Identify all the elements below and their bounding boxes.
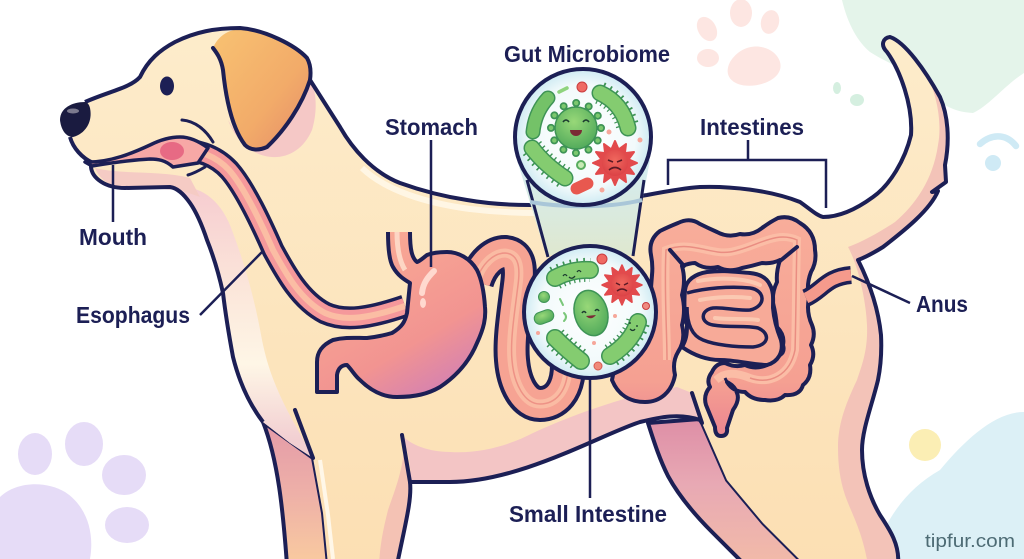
background blob: pale blue bottom right	[872, 412, 1024, 559]
highlight: back	[362, 168, 640, 213]
ear fill	[213, 29, 311, 149]
mouth and tongue	[85, 137, 208, 167]
shading: tail	[848, 72, 948, 260]
coil highlights	[698, 279, 760, 320]
green ring dot	[577, 161, 585, 169]
pink dots	[536, 314, 617, 345]
red dot	[597, 254, 607, 264]
eye	[160, 76, 174, 96]
stomach highlights	[397, 232, 405, 270]
nose highlight	[67, 108, 79, 114]
stomach	[317, 232, 485, 397]
colon centre line	[665, 237, 797, 380]
ear edge	[213, 48, 310, 149]
label: Intestines: Intestines	[700, 114, 804, 140]
green pill	[533, 308, 555, 326]
icon: lavender paw	[0, 422, 149, 559]
esophagus	[170, 150, 405, 318]
label: Anus: Anus	[916, 291, 968, 317]
red dot bottom	[594, 362, 602, 370]
spiky bacterium right	[600, 93, 628, 128]
callout lines	[113, 140, 910, 498]
decorative swoosh: blue	[980, 136, 1016, 171]
shading: chest and neck	[170, 186, 313, 458]
happy virus	[551, 103, 601, 153]
rectum join	[725, 378, 727, 382]
green marks	[560, 299, 566, 321]
small intestine	[476, 253, 568, 404]
spiky bacterium lower left	[555, 338, 581, 361]
shading: belly band	[402, 387, 700, 482]
cheek line	[182, 120, 213, 175]
shading: under ear	[228, 82, 316, 157]
angry red virus	[593, 141, 637, 185]
smiling bacterium top	[555, 270, 590, 278]
colon inner shading	[665, 237, 797, 380]
coil divider	[687, 287, 766, 347]
large intestine	[612, 217, 816, 436]
funnel between circles	[517, 160, 650, 255]
label: Small Intestine: Small Intestine	[509, 501, 667, 527]
background dot: yellow	[909, 429, 941, 461]
label: Esophagus: Esophagus	[76, 302, 190, 328]
label: Mouth: Mouth	[79, 224, 147, 250]
label: Stomach: Stomach	[385, 114, 478, 140]
shading: lower jaw	[95, 168, 200, 197]
band across funnel	[530, 200, 642, 206]
throat highlight	[160, 142, 184, 160]
highlight: front leg	[320, 460, 333, 559]
decorative dots: green	[833, 82, 864, 106]
back front leg	[263, 422, 328, 559]
shading: rump edge	[838, 247, 898, 559]
red pill	[569, 175, 595, 197]
green circle	[538, 292, 550, 302]
panel: bottom microbiome lens	[524, 246, 656, 378]
green dash	[559, 88, 567, 92]
watermark: tipfur.com	[925, 531, 1015, 551]
angry red virus	[602, 265, 642, 305]
leg lines	[295, 393, 702, 482]
colon folds	[670, 247, 797, 266]
icon: pink paw	[693, 0, 782, 86]
red dot small	[642, 302, 650, 310]
spiky bacterium left	[532, 148, 565, 178]
rod bacterium	[533, 98, 548, 132]
big bean bacterium	[569, 287, 613, 339]
pink dots	[600, 130, 642, 192]
spiky bacterium lower right	[610, 322, 638, 356]
back hind leg	[648, 419, 805, 559]
anal canal	[806, 275, 851, 298]
red dot	[577, 82, 587, 92]
background blob: mint top right	[842, 0, 1024, 113]
label: Gut Microbiome: Gut Microbiome	[504, 41, 670, 67]
panel: top microbiome lens	[515, 69, 651, 205]
nose	[60, 102, 91, 137]
small intestine coils	[682, 271, 782, 365]
funnel edges	[527, 180, 644, 257]
shading: front leg rear	[379, 440, 410, 559]
